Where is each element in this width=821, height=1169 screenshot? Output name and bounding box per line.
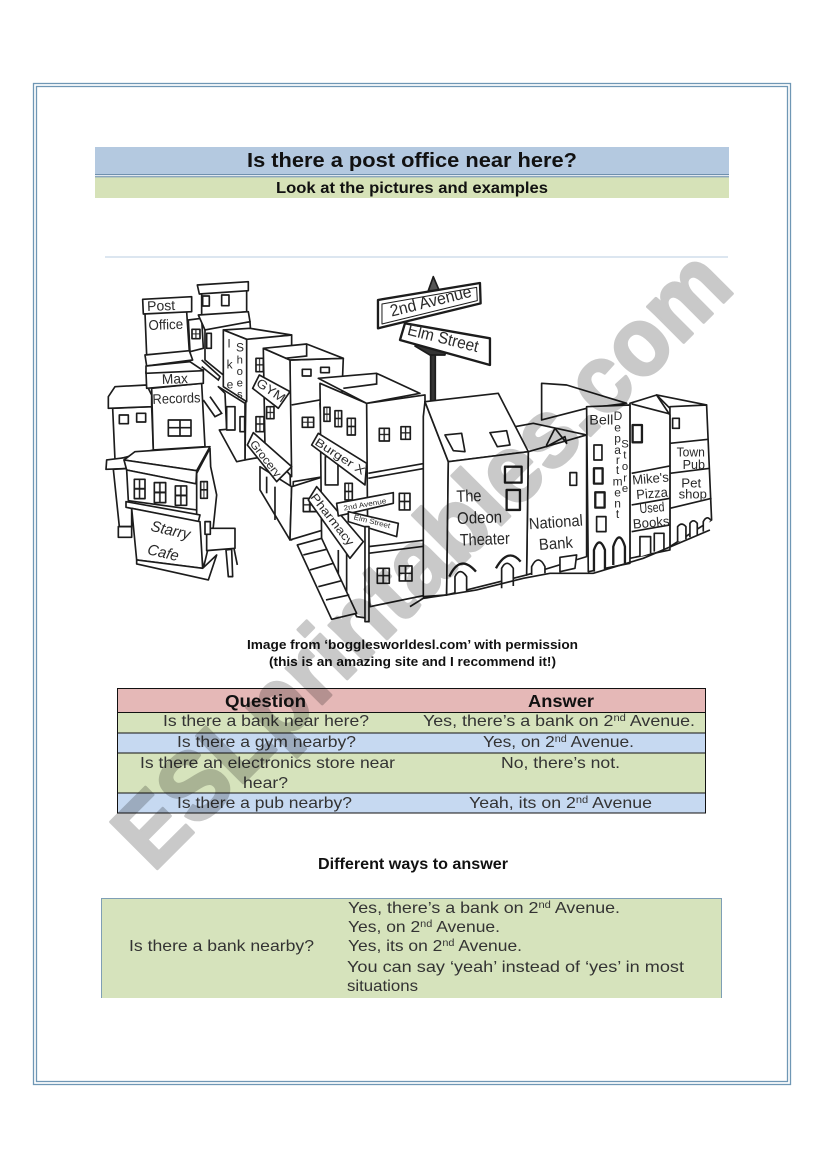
building: bell department store: S (621, 438, 629, 450)
building: town pub and pet shop: Town (677, 445, 705, 460)
building: ike shoes: h (237, 354, 243, 366)
different answers panel: Avenue. (432, 919, 500, 936)
table row: electronics store (118, 753, 706, 793)
table row: gym: Avenue. (567, 734, 634, 751)
building: post office: Office (148, 316, 184, 333)
image credit caption: Image from ‘bogglesworldesl.com’ with permission (247, 638, 578, 652)
right side buildings (410, 383, 712, 607)
building: bell department store: t (616, 507, 620, 521)
subtitle band (95, 177, 729, 198)
building: odeon theater: Odeon (457, 507, 502, 528)
question and answer table (118, 688, 706, 813)
building: ike shoes: e (227, 377, 234, 391)
street signpost: 2nd Avenue (388, 282, 473, 321)
building: bell department store: t (616, 463, 620, 477)
table row: bank: Is there a bank near here? (163, 713, 369, 730)
building: ike shoes: e (237, 378, 243, 390)
building: post office: Post (147, 297, 176, 314)
building: town pub and pet shop: Pet (681, 476, 702, 490)
building: ike shoes: S (236, 341, 244, 355)
building: max records (146, 362, 205, 450)
different answers panel: nd (538, 900, 551, 911)
different answers panel: situations (347, 978, 418, 995)
building: bell department store: e (614, 486, 621, 500)
image credit caption (247, 638, 578, 669)
building: bell department store: m (613, 474, 623, 488)
different answers panel: Yes, its on 2 (348, 938, 435, 955)
table row: pub: Avenue (588, 795, 652, 812)
table row: bank: nd (613, 713, 626, 724)
building: burger x and pharmacy: Elm Street (353, 513, 391, 530)
building: bell department store: o (622, 461, 628, 473)
table row: electronics store: No, there’s not. (501, 755, 620, 772)
building: odeon theater (423, 393, 528, 597)
different answers panel (101, 898, 722, 998)
building: mike's pizza and used books: Books (632, 513, 670, 532)
table row: electronics store: hear? (243, 775, 288, 792)
different answers panel: Avenue. (551, 900, 620, 917)
building: ike shoes: s (237, 389, 243, 401)
building: town pub and pet shop (657, 395, 712, 547)
building: bell department store: t (623, 450, 627, 462)
table row: gym: Yes, on 2 (483, 734, 549, 751)
building: bell department store: Bell (589, 412, 613, 428)
building: odeon theater: Theater (459, 529, 510, 550)
table row: pub (118, 793, 706, 813)
building: ike shoes (218, 328, 292, 462)
different answers panel: Yes, on 2 (348, 919, 414, 936)
street signpost (378, 277, 490, 405)
building: burger x and pharmacy: Burger X (312, 436, 367, 478)
building: post office (143, 297, 193, 366)
building: mike's pizza and used books (630, 395, 670, 558)
building: mike's pizza and used books: Mike's (632, 469, 670, 488)
different answers panel: You can say ‘yeah’ instead of ‘yes’ in most (347, 959, 685, 976)
street signpost: Elm Street (406, 320, 481, 356)
building: starry cafe: Starry (149, 518, 193, 544)
building: burger x and pharmacy (308, 373, 427, 622)
building: gym and grocery: GYM (254, 376, 288, 405)
building: bell department store: r (616, 453, 620, 467)
building: burger x and pharmacy: Pharmacy (308, 491, 357, 549)
building: gym and grocery: Grocery (247, 438, 283, 480)
building: bell department store: n (614, 496, 621, 510)
building: bell department store: p (614, 432, 621, 446)
building: bell department store back (542, 383, 627, 420)
building: ike shoes: I (227, 336, 231, 350)
building: town pub and pet shop: Pub (683, 457, 705, 472)
building: starry cafe (124, 447, 237, 580)
building: national bank (515, 423, 587, 575)
table row: gym: nd (555, 734, 567, 745)
watermark: ESLprintables.com (92, 229, 751, 888)
building: starry cafe: Cafe (146, 541, 180, 565)
building: ike shoes: o (237, 366, 243, 378)
building: bell department store: r (623, 472, 627, 484)
building: national bank: Bank (538, 535, 574, 554)
building: max records: Records (152, 389, 201, 407)
building: odeon theater: The (456, 486, 482, 506)
building: town pub and pet shop: shop (679, 488, 707, 502)
building: ike shoes: k (227, 357, 234, 371)
different answers panel: Yes, there’s a bank on 2 (348, 900, 519, 917)
building: bell department store (587, 405, 630, 572)
different answers panel: Is there a bank nearby? (129, 938, 314, 955)
different answers panel: Avenue. (454, 938, 522, 955)
building: mike's pizza and used books: Used (639, 499, 665, 516)
table row: gym (118, 733, 706, 753)
building: mike's pizza and used books: Pizza (636, 485, 669, 502)
building: national bank: National (528, 513, 583, 533)
steps (297, 538, 357, 619)
different answers panel: nd (442, 938, 454, 949)
table row: pub: Is there a pub nearby? (177, 795, 352, 812)
table header row (118, 688, 706, 712)
table row: pub: Yeah, its on 2 (469, 795, 565, 812)
building: gym and grocery (247, 344, 343, 540)
image credit caption: (this is an amazing site and I recommend it!) (269, 655, 556, 669)
table row: bank (118, 712, 706, 733)
building: bell department store: e (614, 420, 621, 434)
building: burger x and pharmacy: 2nd Avenue (343, 496, 387, 513)
section heading: Different ways to answer (318, 856, 508, 873)
table row: bank: Yes, there’s a bank on 2 (423, 713, 594, 730)
building: bell department store: a (614, 443, 621, 457)
table row: pub: nd (576, 795, 588, 806)
ground line (410, 530, 710, 607)
street illustration (106, 277, 712, 622)
building: back tower (188, 282, 253, 417)
title band: Is there a post office near here? (247, 150, 577, 172)
page border (34, 84, 790, 1084)
divider line above illustration (105, 256, 728, 258)
table row: gym: Is there a gym nearby? (177, 734, 356, 751)
building: bell department store: e (622, 483, 628, 495)
building: max records: Max (162, 370, 188, 387)
table row: bank: Avenue. (626, 713, 695, 730)
different answers panel: nd (420, 919, 432, 930)
table row: electronics store: Is there an electronics store near (140, 755, 396, 772)
table header row: Answer (528, 691, 594, 711)
building: bell department store: D (614, 409, 623, 423)
table header row: Question (225, 691, 306, 711)
title band (95, 147, 729, 177)
subtitle band: Look at the pictures and examples (276, 180, 548, 197)
building: left house (106, 385, 153, 537)
